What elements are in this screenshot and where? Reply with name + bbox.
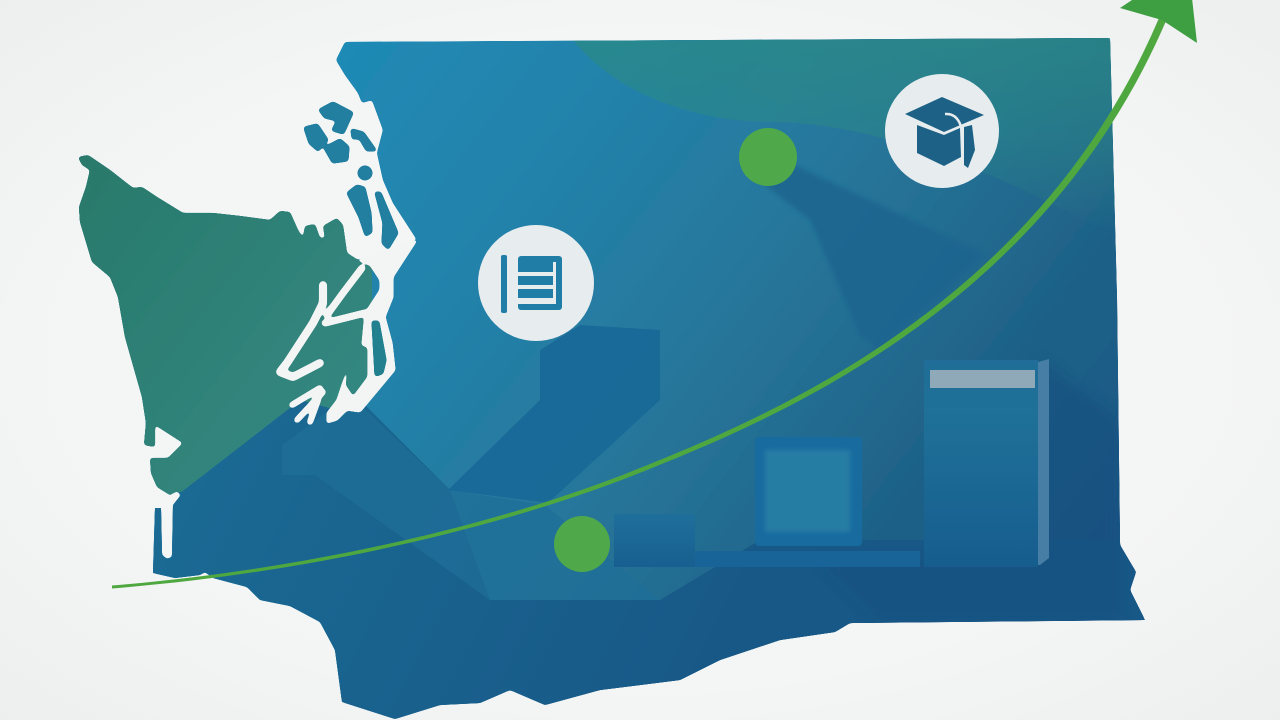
icon: graduation cap xyxy=(885,74,999,188)
bar 3 xyxy=(924,359,1049,567)
green dot lower xyxy=(554,516,610,572)
bar chart xyxy=(614,359,1049,567)
top green arc xyxy=(574,38,1114,186)
map: Washington state xyxy=(78,36,1145,720)
green dot upper xyxy=(739,128,797,186)
bar 1 xyxy=(614,514,695,567)
growth arrow xyxy=(112,0,1197,588)
arrowhead xyxy=(1120,0,1197,43)
Puget Sound islands xyxy=(305,103,397,375)
icon: book xyxy=(478,225,594,341)
green western peninsula xyxy=(78,155,372,495)
right side shading xyxy=(1049,372,1120,502)
Puget Sound water xyxy=(280,240,417,423)
bar 2 xyxy=(755,437,862,546)
lower-left dark facet xyxy=(150,398,1145,720)
mid lighter facet xyxy=(376,453,506,600)
state land mass xyxy=(78,38,1145,719)
shaded facets inside state xyxy=(150,36,1145,720)
chart baseline xyxy=(695,551,920,567)
cap dot shadow xyxy=(767,166,926,320)
book icon long shadow xyxy=(448,325,660,503)
